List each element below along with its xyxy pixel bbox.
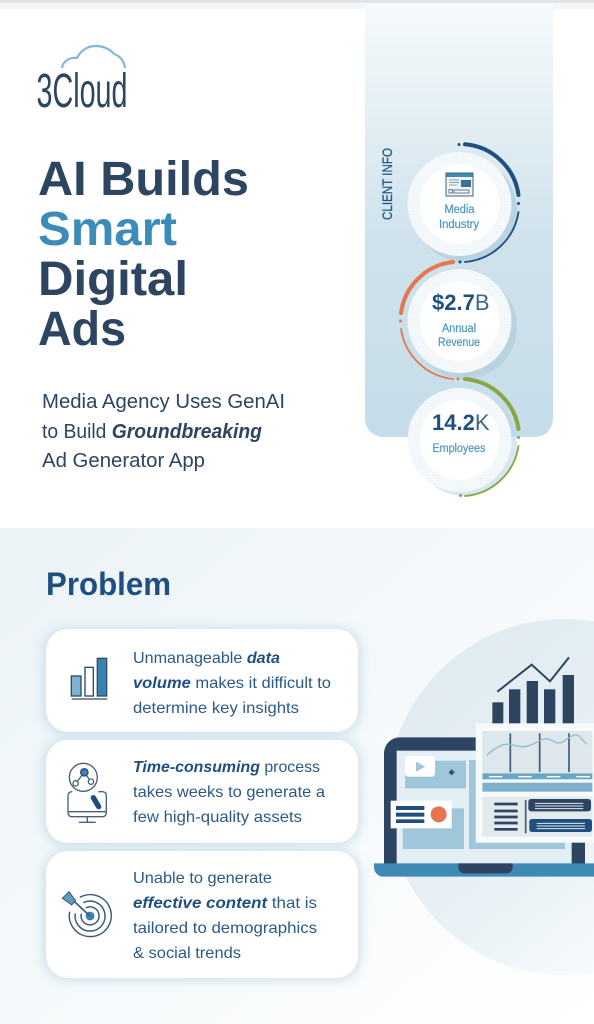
stat: annual revenue: Revenue (438, 337, 480, 349)
stat: employees: Employees (432, 443, 486, 455)
card text: Time-consuming process (133, 759, 320, 776)
stat: media industry (408, 143, 520, 264)
subtitle (42, 391, 285, 472)
card text: few high-quality assets (133, 809, 302, 826)
logo cloud outline (62, 46, 125, 68)
panel: problem section background (0, 528, 594, 1024)
label: client info: CLIENT INFO (379, 148, 395, 220)
illustration: laptop with dashboards (374, 657, 594, 877)
stat: employees (408, 379, 520, 497)
title: Digital (38, 253, 188, 306)
stat: annual revenue: $2.7B (432, 290, 490, 315)
stat: media industry: Industry (439, 219, 479, 231)
card text: tailored to demographics (133, 920, 317, 937)
ad card with badge (391, 801, 452, 828)
icon: target with arrow (62, 892, 111, 937)
stat: employees: 14.2K (432, 410, 490, 435)
card text (133, 650, 331, 717)
card text: Unable to generate (133, 870, 272, 887)
card text: Unmanageable data (133, 650, 280, 667)
analytics dashboard panel (476, 723, 594, 843)
laptop body (374, 737, 594, 877)
title: Smart (38, 203, 177, 256)
top strip (0, 0, 594, 9)
card text: determine key insights (133, 700, 299, 717)
icon: media browser window (446, 173, 473, 196)
card text (133, 759, 325, 826)
icon: magnifier over monitor (68, 763, 106, 822)
illustration backdrop circle (387, 619, 594, 975)
stat: annual revenue (399, 262, 517, 380)
heading: problem: Problem (46, 566, 171, 602)
card: effective content (44, 851, 360, 980)
logo wordmark: 3Cloud (36, 65, 128, 118)
card text (133, 870, 317, 962)
subtitle: Ad Generator App (42, 450, 205, 472)
card text: & social trends (133, 945, 241, 962)
subtitle: Media Agency Uses GenAI (42, 391, 285, 413)
stat: media industry: Media (444, 204, 475, 216)
title: AI Builds (38, 153, 249, 206)
title: Ads (38, 303, 126, 356)
title (38, 153, 249, 356)
card text: volume makes it difficult to (133, 675, 331, 692)
card: time-consuming (44, 740, 360, 845)
stat: annual revenue: Annual (442, 323, 476, 335)
subtitle: to Build Groundbreaking (42, 421, 262, 443)
card text: takes weeks to generate a (133, 784, 325, 801)
icon: bar chart (71, 658, 107, 699)
card text: effective content that is (133, 895, 317, 912)
panel: client info background (365, 3, 553, 437)
card: data volume (44, 629, 360, 734)
logo: 3Cloud (36, 46, 128, 118)
bar chart with trend line (492, 657, 574, 724)
